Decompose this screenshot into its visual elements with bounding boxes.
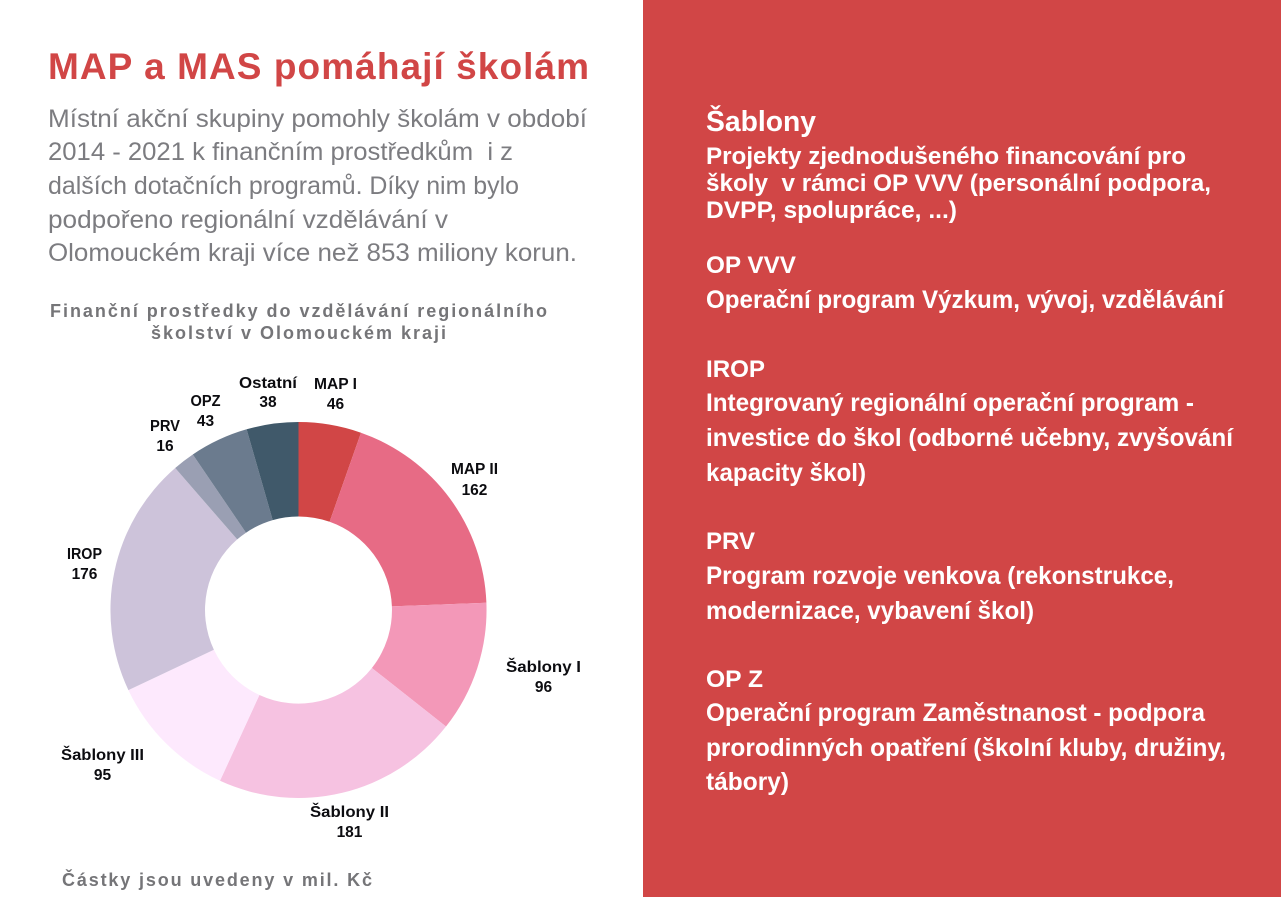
label: MAP II bbox=[451, 461, 498, 499]
segment: MAP II bbox=[330, 433, 486, 606]
label: PRV bbox=[150, 418, 181, 455]
definition: Šablony bbox=[706, 104, 1211, 224]
label: Šablony III: 95 bbox=[94, 767, 111, 784]
segment: MAP I bbox=[298, 422, 361, 522]
label: Ostatní bbox=[239, 375, 298, 411]
label: OPZ bbox=[190, 393, 221, 430]
label: MAP II: MAP II bbox=[451, 461, 498, 478]
intro text block: Místní akční skupiny pomohly školám v období bbox=[48, 105, 587, 133]
definition: Šablony: Šablony bbox=[706, 104, 816, 138]
panel: left background bbox=[0, 0, 643, 897]
title: MAP a MAS pomáhají školám bbox=[48, 46, 589, 87]
definition: PRV: Program rozvoje venkova (rekonstrukce, bbox=[706, 562, 1174, 590]
chart heading: školství v Olomouckém kraji bbox=[151, 323, 446, 343]
label: Šablony III: Šablony III bbox=[61, 746, 144, 764]
definition: OP VVV: OP VVV bbox=[706, 252, 796, 279]
definitions text bbox=[706, 104, 1234, 796]
donut chart bbox=[110, 422, 487, 798]
definition: IROP: investice do škol (odborné učebny, zvyšování bbox=[706, 424, 1234, 452]
chart heading bbox=[50, 301, 547, 343]
definition: OP Z: OP Z bbox=[706, 666, 763, 693]
definition: PRV: PRV bbox=[706, 528, 755, 555]
label: MAP I bbox=[314, 376, 357, 413]
label: Ostatní: 38 bbox=[259, 394, 277, 411]
panel: right definitions background bbox=[643, 0, 1281, 897]
chart heading: Finanční prostředky do vzdělávání regionálního bbox=[50, 301, 547, 321]
segment: IROP bbox=[110, 468, 237, 690]
label: Šablony I: 96 bbox=[535, 679, 552, 696]
definition: OP Z: Operační program Zaměstnanost - podpora bbox=[706, 699, 1206, 727]
definition: Šablony: DVPP, spolupráce, ...) bbox=[706, 197, 957, 224]
definition: OP VVV bbox=[706, 252, 1225, 314]
segment: Šablony II bbox=[220, 668, 446, 798]
label: Šablony I: Šablony I bbox=[506, 658, 581, 676]
intro text block: dalších dotačních programů. Díky nim bylo bbox=[48, 172, 519, 200]
definition: OP VVV: Operační program Výzkum, vývoj, vzdělávání bbox=[706, 286, 1225, 314]
label: OPZ: OPZ bbox=[190, 393, 221, 410]
segment: PRV bbox=[175, 454, 246, 539]
chart footnote: Částky jsou uvedeny v mil. Kč bbox=[62, 869, 372, 890]
definition: OP Z: prorodinných opatření (školní kluby, družiny, bbox=[706, 734, 1226, 762]
definition: OP Z bbox=[706, 666, 1226, 796]
label: Šablony II: 181 bbox=[337, 824, 363, 841]
chart labels bbox=[61, 375, 581, 841]
definition: Šablony: školy v rámci OP VVV (personální podpora, bbox=[706, 170, 1211, 197]
label: PRV: 16 bbox=[156, 438, 174, 455]
label: IROP: IROP bbox=[67, 546, 102, 563]
segment: Šablony I bbox=[372, 603, 487, 726]
label: IROP bbox=[67, 546, 102, 583]
definition: IROP: kapacity škol) bbox=[706, 459, 866, 487]
definition: PRV: modernizace, vybavení škol) bbox=[706, 597, 1034, 625]
definition: IROP: IROP bbox=[706, 356, 765, 383]
label: Šablony III bbox=[61, 746, 144, 784]
segment: Šablony III bbox=[128, 650, 259, 781]
definition: IROP bbox=[706, 356, 1234, 487]
intro text block bbox=[48, 105, 587, 267]
label: MAP I: 46 bbox=[327, 396, 344, 413]
segment: OPZ bbox=[193, 429, 273, 533]
definition: OP Z: tábory) bbox=[706, 768, 789, 796]
intro text block: podpořeno regionální vzdělávání v bbox=[48, 206, 449, 234]
definition: IROP: Integrovaný regionální operační program - bbox=[706, 389, 1194, 417]
label: MAP II: 162 bbox=[462, 482, 487, 499]
label: PRV: PRV bbox=[150, 418, 181, 435]
segment: Ostatní bbox=[247, 422, 298, 520]
label: IROP: 176 bbox=[72, 566, 98, 583]
label: Ostatní: Ostatní bbox=[239, 375, 298, 392]
label: Šablony I bbox=[506, 658, 581, 696]
intro text block: 2014 - 2021 k finančním prostředkům i z bbox=[48, 138, 513, 166]
label: OPZ: 43 bbox=[197, 413, 214, 430]
definition: Šablony: Projekty zjednodušeného financování pro bbox=[706, 143, 1186, 170]
label: Šablony II: Šablony II bbox=[310, 803, 389, 821]
label: Šablony II bbox=[310, 803, 389, 841]
definition: PRV bbox=[706, 528, 1174, 625]
intro text block: Olomouckém kraji více než 853 miliony korun. bbox=[48, 239, 577, 267]
label: MAP I: MAP I bbox=[314, 376, 357, 393]
